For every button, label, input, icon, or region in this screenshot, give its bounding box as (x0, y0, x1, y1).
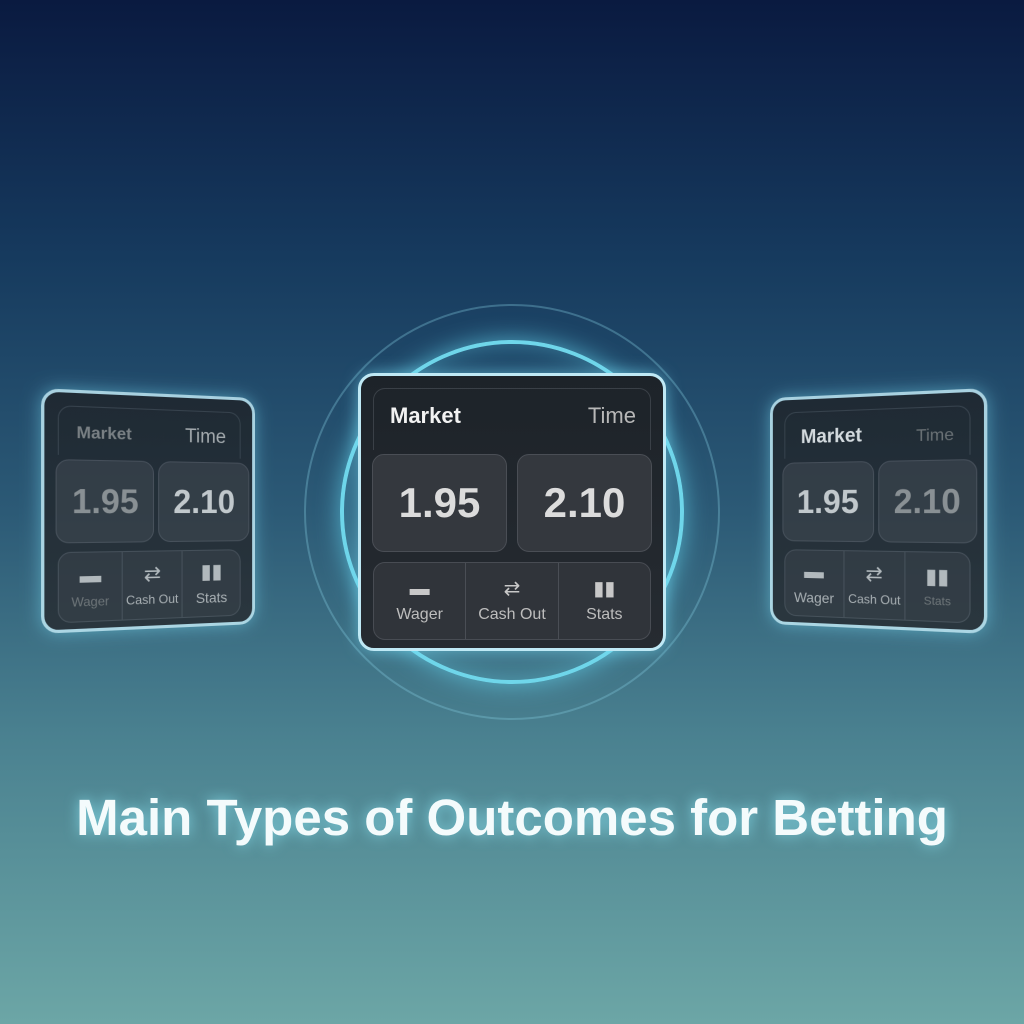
action bar: Stats (586, 606, 623, 623)
action bar: ▬ (410, 578, 430, 600)
left card: ▬ (80, 564, 101, 588)
left card: ▮▮ (201, 561, 222, 584)
right card: Wager (794, 589, 834, 606)
left card: ⇄ (144, 563, 161, 586)
odds 2.10 (517, 454, 652, 552)
odds 1.95 (372, 454, 507, 552)
right card (770, 388, 987, 634)
right card: ▮▮ (925, 565, 949, 589)
odds 2.10: 2.10 (544, 479, 625, 526)
right card: ⇄ (865, 563, 883, 586)
right card: Stats (924, 595, 951, 609)
right card: Cash Out (848, 591, 901, 608)
header (373, 388, 651, 450)
left card: Market (76, 424, 132, 444)
right card: 2.10 (894, 481, 961, 520)
left card: Wager (71, 594, 109, 610)
left card (41, 388, 255, 634)
action bar: Cash Out (478, 606, 546, 623)
left card: Time (185, 426, 226, 448)
title: Main Types of Outcomes for Betting (76, 789, 948, 846)
left card: Stats (196, 589, 227, 606)
action bar: ⇄ (504, 578, 520, 600)
action bar (373, 562, 651, 640)
left card: 1.95 (72, 481, 139, 520)
right card: Market (801, 425, 862, 448)
right card: Time (916, 426, 954, 445)
action bar: Wager (396, 606, 443, 623)
left card: 2.10 (173, 483, 235, 520)
odds 1.95: 1.95 (399, 479, 480, 526)
left card: Cash Out (126, 591, 178, 608)
glowing ring (340, 340, 684, 684)
header: Time (588, 403, 636, 428)
right card: 1.95 (797, 483, 859, 520)
outer ring (304, 304, 720, 720)
right card: ▬ (804, 561, 824, 584)
center card (358, 373, 666, 651)
header: Market (390, 403, 461, 428)
action bar: ▮▮ (593, 578, 615, 600)
